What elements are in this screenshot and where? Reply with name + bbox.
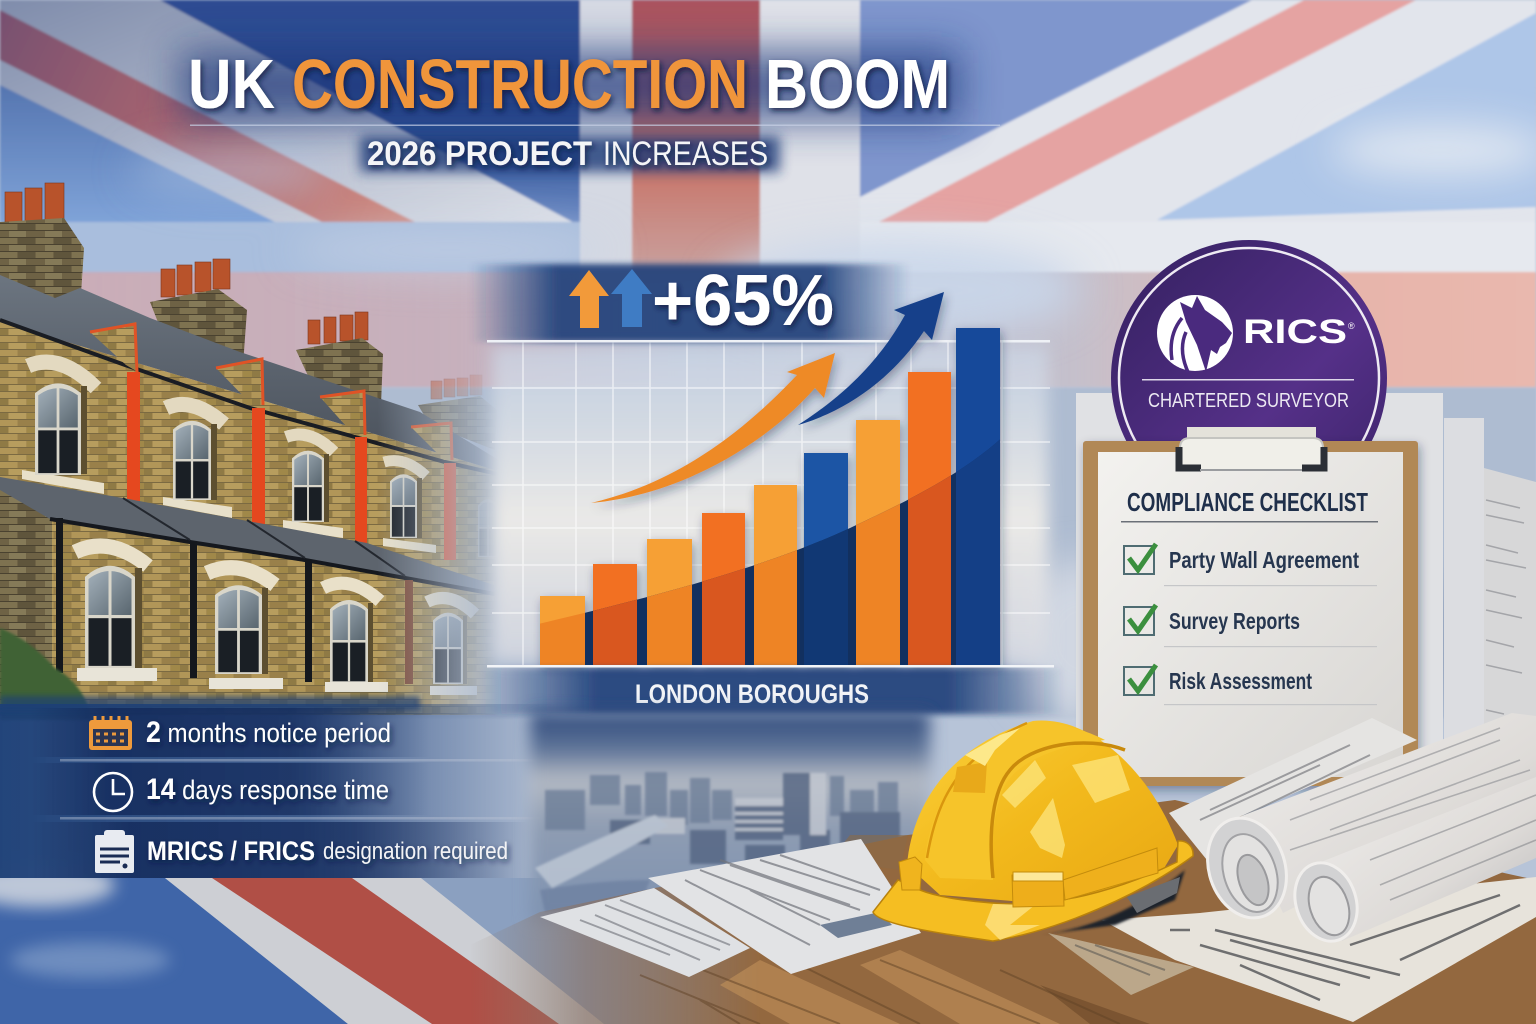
info row: notice period xyxy=(30,708,560,762)
logotype: RICS xyxy=(1243,313,1347,351)
chimney stacks and pots xyxy=(0,183,497,450)
document: rear sheet xyxy=(1048,933,1194,995)
badge: RICS Chartered Surveyor xyxy=(1111,240,1387,441)
plus 65 percent band xyxy=(470,264,910,342)
info row: designation xyxy=(30,822,530,878)
helmet clip and strip xyxy=(899,848,1158,907)
background: lower flag saltire xyxy=(0,863,900,1024)
helmet highlights xyxy=(1002,755,1130,858)
illustration: terraced houses xyxy=(0,183,515,720)
lower windows xyxy=(75,546,477,695)
orange drainpipes and gables xyxy=(90,322,456,560)
icon: document xyxy=(95,830,134,873)
title: UK Construction Boom: UK xyxy=(188,45,275,123)
document: right sheet xyxy=(1102,877,1536,1022)
icon: orange arrow xyxy=(569,270,609,328)
subtitle xyxy=(367,135,768,173)
checklist item: party wall agreement: Party Wall Agreement xyxy=(1169,547,1359,573)
arrow icons xyxy=(569,269,652,328)
subtitle: INCREASES xyxy=(603,135,768,173)
illustration: scattered documents xyxy=(540,718,1536,1022)
upper windows xyxy=(22,362,498,557)
icon: clock xyxy=(94,773,132,811)
arrow: orange trend xyxy=(591,353,835,503)
upper slate roof xyxy=(0,275,515,476)
helmet brim xyxy=(873,841,1193,941)
checklist item: survey reports: Survey Reports xyxy=(1169,608,1300,634)
illustration: yellow hard hat xyxy=(873,721,1193,941)
document: left sheet xyxy=(540,888,750,977)
title backdrop haze xyxy=(180,50,1000,172)
icon: calendar xyxy=(89,716,132,750)
chart backdrop and grid xyxy=(492,342,1050,665)
roll: front xyxy=(1285,777,1536,949)
helmet dome xyxy=(907,721,1178,905)
arrow: blue trend xyxy=(798,292,944,425)
badge: RICS Chartered Surveyor: ® xyxy=(1348,321,1355,331)
panel: compliance clipboard xyxy=(1083,427,1418,786)
bush xyxy=(0,628,92,720)
label: London Boroughs: LONDON BOROUGHS xyxy=(635,679,869,709)
title: UK Construction Boom: CONSTRUCTION xyxy=(292,45,748,123)
document: upper sheet xyxy=(1169,718,1417,870)
illustration: wooden table xyxy=(440,800,1536,1024)
rising swoosh over bars xyxy=(540,440,1000,665)
chart baseline xyxy=(487,665,1054,668)
clipboard clip xyxy=(1179,427,1324,470)
checklist item: risk assessment: Risk Assessment xyxy=(1169,668,1312,694)
title: UK Construction Boom: BOOM xyxy=(765,45,950,123)
bars xyxy=(540,328,1000,665)
lower facade xyxy=(50,516,500,715)
icon: blue arrow xyxy=(611,269,652,327)
subtitle: 2026 PROJECT xyxy=(367,135,592,173)
helmet shadow and harness xyxy=(1040,870,1185,935)
illustration: rolled plans xyxy=(1195,713,1536,949)
info band backdrop xyxy=(0,696,560,878)
info row: response time: 14 days response time xyxy=(146,773,389,806)
checklist heading: COMPLIANCE CHECKLIST xyxy=(1127,487,1368,517)
info row: response time xyxy=(30,763,540,820)
chart: London boroughs growth xyxy=(470,261,1065,714)
checklist item: party wall agreement xyxy=(1124,544,1377,586)
info row: notice period: 2 months notice period xyxy=(146,716,391,749)
panel: background paper stack xyxy=(1076,393,1536,783)
info row: designation: designation required xyxy=(323,838,508,865)
lower slate roof xyxy=(0,477,497,594)
upper gutter xyxy=(0,320,515,478)
illustration: city skyline xyxy=(530,712,930,922)
icon: RICS lion xyxy=(1157,295,1233,372)
checklist item: risk assessment xyxy=(1124,665,1377,705)
lower downpipes xyxy=(56,518,413,684)
helmet ridge xyxy=(925,723,1125,880)
clouds xyxy=(130,124,1536,720)
checklist item: survey reports xyxy=(1124,605,1377,647)
chart top rule xyxy=(487,340,1050,342)
badge caption: CHARTERED SURVEYOR xyxy=(1148,390,1349,412)
document: centre sheet xyxy=(648,839,921,974)
label band xyxy=(480,668,1065,714)
info row: designation: MRICS / FRICS xyxy=(147,836,315,866)
stat: +65%: +65% xyxy=(652,261,834,341)
roll: rear xyxy=(1195,713,1536,928)
upper facade xyxy=(0,322,515,592)
